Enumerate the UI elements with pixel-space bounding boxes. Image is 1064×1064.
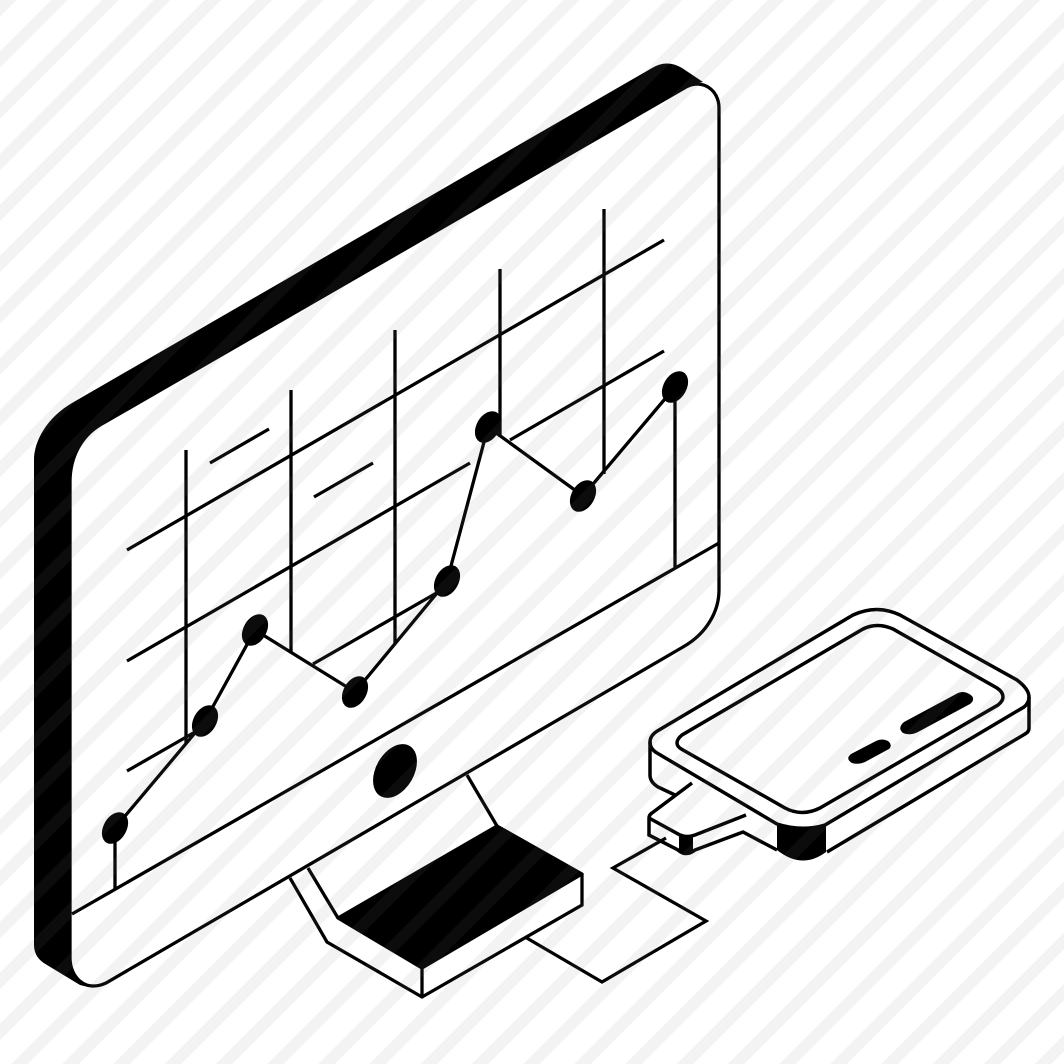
device screen [677,626,1003,812]
plug dark side [679,836,693,855]
line chart [97,209,693,890]
cable [525,838,706,982]
monitor side edge [34,64,703,987]
monitor chin divider [72,543,719,914]
device side edges [650,697,1029,852]
device [649,610,1029,861]
stand arm and base edges [290,775,582,997]
camera [364,736,426,806]
stand base top [338,826,582,968]
plug [649,783,777,855]
data line [115,387,675,828]
device dark corner [777,824,826,861]
legend dashes [210,429,373,497]
monitor [34,64,719,987]
device status bars [848,692,973,764]
monitor stand [290,775,582,997]
chart grid lines [115,209,675,890]
device top outline [650,610,1029,828]
monitor screen outline [70,84,719,986]
data points [97,367,693,848]
